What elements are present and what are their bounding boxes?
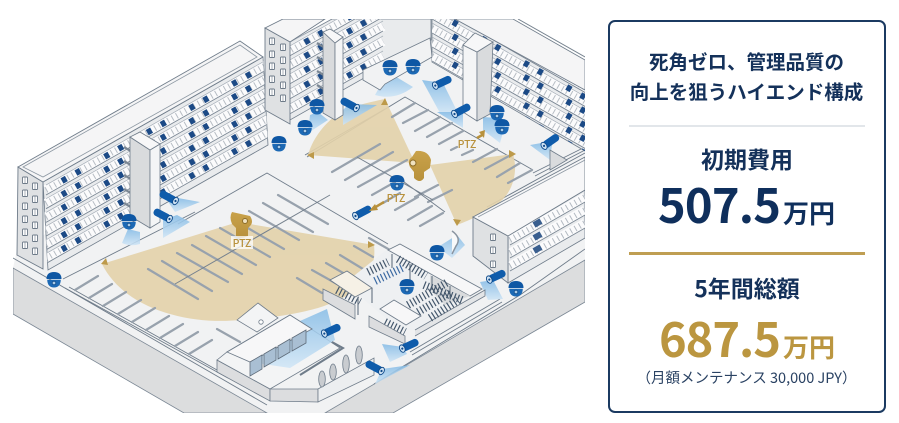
five year total value: [659, 302, 835, 371]
ground surface: [13, 19, 585, 413]
PTZ camera: lower: [230, 212, 252, 238]
heading: 向上を狙うハイエンド構成: [630, 76, 863, 105]
ground front faces: [13, 260, 585, 413]
PTZ label: right with arrow: [458, 130, 485, 148]
PTZ camera: upper: [409, 151, 431, 181]
PTZ coverage cones: [102, 99, 515, 321]
five year total value: 687.5: [659, 302, 781, 371]
building: front right block: [473, 157, 585, 283]
five year total label: 5年間総額: [694, 270, 800, 304]
building: back centre block: [264, 19, 432, 125]
PTZ label: right with arrow: PTZ: [458, 137, 476, 152]
initial cost value: 507.5: [658, 168, 781, 237]
bicycle parking sheds: [323, 231, 485, 344]
parking stalls: [75, 103, 532, 354]
panel: isometric parking site illustration: [13, 0, 600, 413]
blue camera coverage: [122, 72, 552, 384]
five year total value: 万円: [783, 328, 835, 365]
heading: 死角ゼロ、管理品質の: [649, 46, 844, 75]
bullet cameras: [152, 75, 561, 376]
PTZ label: middle with arrow: [369, 194, 405, 211]
initial cost label: 初期費用: [701, 141, 793, 175]
initial cost value: [658, 168, 835, 237]
dome cameras: [46, 59, 524, 296]
PTZ label: middle with arrow: PTZ: [387, 191, 405, 206]
initial cost value: 万円: [783, 194, 835, 231]
panel: cost summary: [609, 21, 885, 412]
maintenance note: （月額メンテナンス 30,000 JPY）: [637, 367, 856, 388]
building: back right block: [432, 19, 585, 171]
shelter with planters: [217, 303, 374, 402]
building: left long block: [17, 41, 268, 270]
heading: [630, 46, 863, 105]
PTZ label: lower: PTZ: [233, 236, 251, 251]
cone end arrowheads: [101, 98, 516, 265]
road and curb lines: [13, 97, 585, 405]
